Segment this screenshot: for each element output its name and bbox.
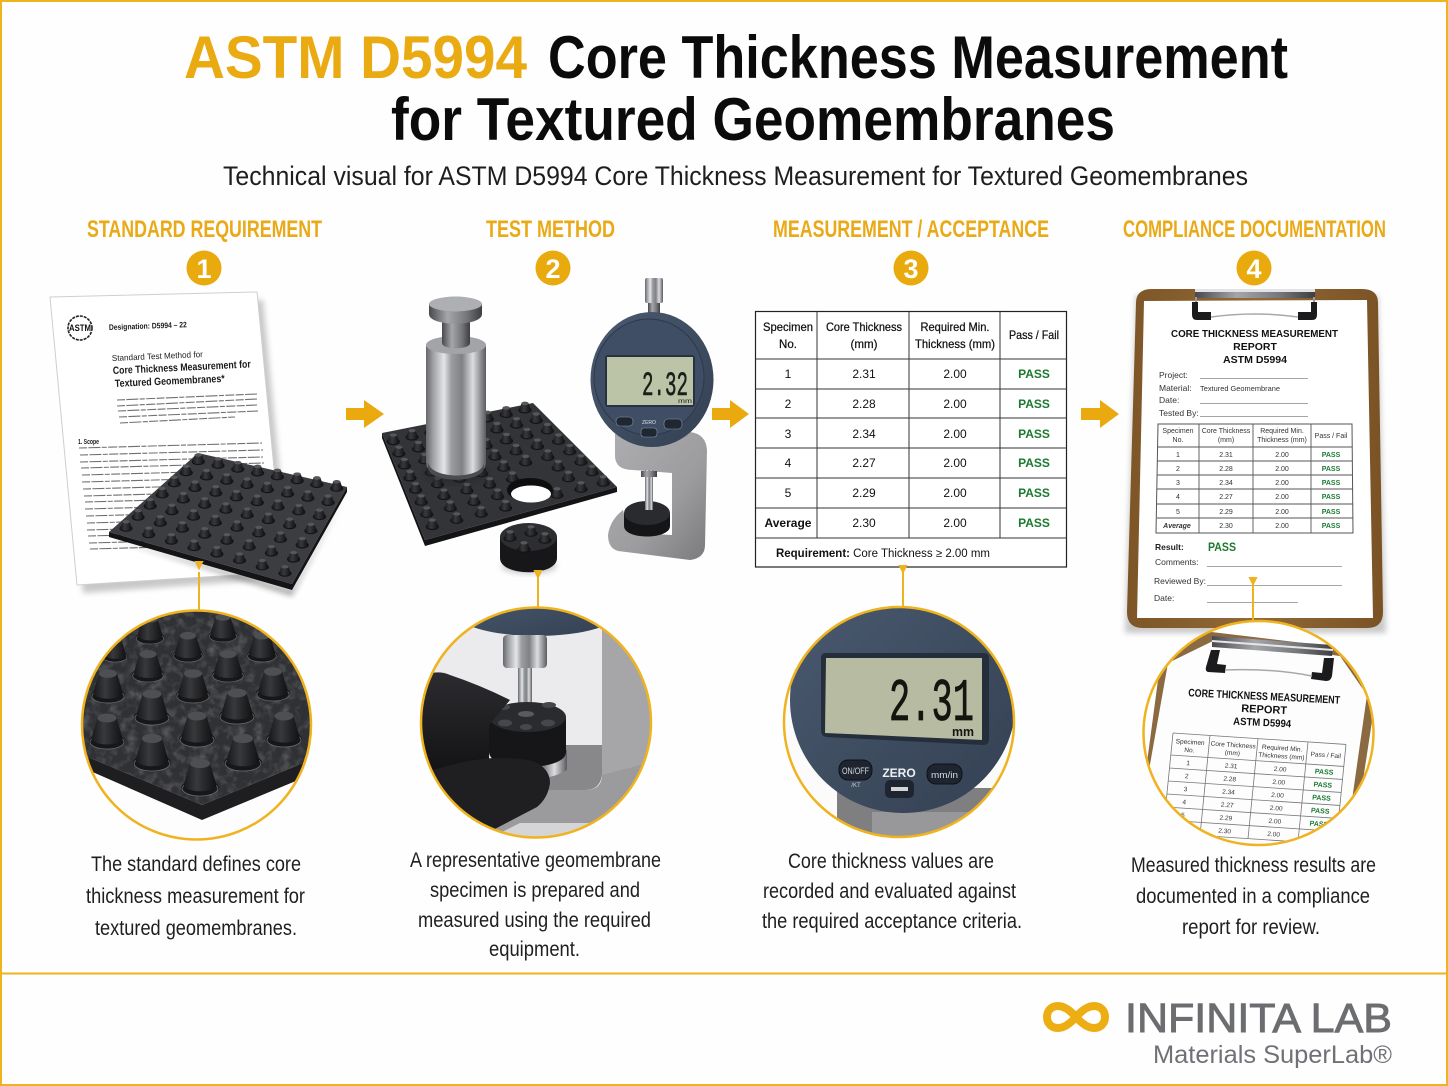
report table in detail: 5 bbox=[1181, 812, 1185, 819]
table rows: 2.34 bbox=[852, 427, 876, 441]
report table cells: 2 bbox=[1176, 466, 1180, 473]
table rows bbox=[765, 367, 967, 530]
table rows: 2.27 bbox=[852, 456, 876, 470]
report title: CORE THICKNESS MEASUREMENT bbox=[1171, 328, 1339, 340]
table rows: Average bbox=[765, 516, 812, 530]
caption 4 bbox=[1131, 854, 1376, 939]
step number badges bbox=[186, 250, 1272, 286]
textured geomembrane sample bbox=[109, 453, 347, 590]
table grid bbox=[755, 311, 1067, 538]
paper heading text: Designation: D5994 – 22 bbox=[109, 320, 187, 332]
report table in detail: 2.00 bbox=[1268, 818, 1282, 826]
report table in detail: PASS bbox=[1314, 769, 1334, 777]
ASTM logo on paper bbox=[68, 316, 92, 340]
report table pass column: PASS bbox=[1322, 494, 1341, 501]
report table cells: 2.34 bbox=[1219, 480, 1233, 487]
caption 1: textured geomembranes. bbox=[95, 917, 297, 940]
pass column: PASS bbox=[1018, 427, 1050, 441]
report table pass column: PASS bbox=[1322, 466, 1341, 473]
caption 2: specimen is prepared and bbox=[430, 879, 640, 902]
table rows: 2.28 bbox=[852, 397, 876, 411]
paper heading text: Standard Test Method for bbox=[112, 349, 203, 363]
report table cells: 2.00 bbox=[1275, 466, 1289, 473]
connector 2 bbox=[535, 571, 541, 607]
caption 4: documented in a compliance bbox=[1136, 885, 1370, 908]
table header: Required Min. bbox=[920, 320, 990, 334]
report table in detail: 2 bbox=[1185, 773, 1189, 780]
panel: standard document and geomembrane sample bbox=[50, 292, 347, 596]
caption 3: Core thickness values are bbox=[788, 850, 994, 873]
report table in detail: PASS bbox=[1311, 808, 1330, 816]
panel: test equipment bbox=[382, 278, 714, 574]
table rows: 2.00 bbox=[943, 427, 967, 441]
table header: Pass / Fail bbox=[1009, 328, 1059, 342]
panel: measurement table bbox=[755, 311, 1067, 567]
digital thickness gauge bbox=[590, 278, 714, 560]
report table cells: 2.29 bbox=[1219, 509, 1233, 516]
report table cells: 4 bbox=[1176, 494, 1180, 501]
report table pass column: PASS bbox=[1322, 480, 1341, 487]
report table in detail: 2.29 bbox=[1219, 815, 1233, 822]
report table in detail: Core Thickness bbox=[1210, 741, 1257, 751]
detail circle 4: report close-up bbox=[1144, 621, 1376, 850]
gauge spindle bbox=[645, 470, 653, 510]
report table in detail: 2.00 bbox=[1271, 792, 1284, 800]
ASTM logo on paper: ASTM bbox=[69, 323, 91, 334]
gauge buttons bbox=[616, 417, 682, 437]
arrow 3 bbox=[1081, 400, 1119, 428]
report table in detail: PASS bbox=[1309, 821, 1329, 829]
pass column: PASS bbox=[1018, 486, 1050, 500]
clipboard edges in detail bbox=[1148, 632, 1372, 796]
table header bbox=[763, 320, 1059, 351]
black glove bbox=[422, 672, 510, 770]
detail circle 3: gauge display: mm bbox=[952, 724, 974, 739]
pass column: PASS bbox=[1018, 397, 1050, 411]
report table in detail: 2.00 bbox=[1269, 805, 1283, 813]
gauge frame behind display bbox=[837, 788, 992, 832]
report table cells: 2.30 bbox=[1219, 523, 1233, 530]
logo: Infinita Lab bbox=[1047, 995, 1393, 1069]
table header: (mm) bbox=[850, 337, 878, 351]
report title in detail bbox=[1188, 687, 1341, 730]
report title: ASTM D5994 bbox=[1223, 354, 1287, 366]
report title bbox=[1171, 328, 1339, 366]
arrow 2 bbox=[712, 400, 749, 428]
report table in detail: 2.34 bbox=[1222, 789, 1235, 796]
report result: Comments: bbox=[1155, 557, 1198, 567]
report table cells: 2.00 bbox=[1275, 523, 1289, 530]
specimen in detail bbox=[489, 717, 566, 767]
gauge C-frame bbox=[608, 432, 707, 560]
table header: Thickness (mm) bbox=[915, 337, 995, 351]
LCD screen bbox=[825, 658, 982, 740]
table rows: 4 bbox=[785, 456, 792, 470]
measured specimen in gauge bbox=[624, 513, 670, 536]
report table cells: 1 bbox=[1176, 452, 1180, 459]
report table in detail: Thickness (mm) bbox=[1258, 752, 1305, 762]
report fields: Date: bbox=[1159, 395, 1179, 405]
report table in detail: Required Min. bbox=[1262, 744, 1303, 754]
section headings: MEASUREMENT / ACCEPTANCE bbox=[773, 216, 1049, 243]
table rows: 2.00 bbox=[943, 516, 967, 530]
report table in detail: 4 bbox=[1182, 799, 1187, 806]
caption 2: measured using the required bbox=[418, 909, 651, 932]
display buttons bbox=[839, 760, 962, 798]
caption 3: recorded and evaluated against bbox=[763, 880, 1016, 903]
table rows: 5 bbox=[785, 486, 792, 500]
report table cells: Average bbox=[1162, 523, 1191, 530]
title: ASTM D5994 bbox=[184, 24, 528, 91]
caption 3 bbox=[762, 850, 1022, 933]
report table bbox=[1156, 424, 1353, 533]
caption 1: thickness measurement for bbox=[86, 885, 305, 908]
report table cells: Core Thickness bbox=[1202, 428, 1251, 435]
report result: Result: bbox=[1155, 542, 1184, 552]
pass column: PASS bbox=[1018, 367, 1050, 381]
report table in detail: No. bbox=[1184, 747, 1195, 755]
sample shadow bbox=[109, 492, 347, 596]
report table cells: 2.31 bbox=[1219, 452, 1233, 459]
report table cells: 2.00 bbox=[1275, 452, 1289, 459]
wordmark: INFINITA LAB bbox=[1125, 995, 1392, 1041]
report table in detail: 3 bbox=[1183, 786, 1188, 793]
caption 4: Measured thickness results are bbox=[1131, 854, 1376, 877]
report table cells: No. bbox=[1173, 437, 1183, 444]
small circular specimen bbox=[500, 523, 557, 574]
report table in detail: 2.00 bbox=[1273, 766, 1287, 774]
report table cells: 2.27 bbox=[1219, 494, 1233, 501]
punched geomembrane sheet bbox=[382, 402, 617, 546]
report table pass column: PASS bbox=[1322, 452, 1341, 459]
report table cells: 3 bbox=[1176, 480, 1180, 487]
section headings: STANDARD REQUIREMENT bbox=[87, 216, 322, 243]
caption 1 bbox=[86, 853, 305, 940]
detail circle 2: gloved hand placing specimen bbox=[420, 606, 652, 839]
report result bbox=[1154, 540, 1342, 603]
report title in detail: ASTM D5994 bbox=[1233, 716, 1292, 730]
connector 4 bbox=[1250, 578, 1256, 621]
report result: PASS bbox=[1208, 540, 1236, 554]
gauge display bbox=[605, 355, 695, 407]
report fields: Textured Geomembrane bbox=[1200, 384, 1280, 393]
report fields bbox=[1159, 370, 1280, 418]
section headings: TEST METHOD bbox=[486, 216, 615, 243]
report paper bbox=[1137, 300, 1373, 618]
pass column: PASS bbox=[1018, 456, 1050, 470]
footer divider bbox=[0, 972, 1448, 974]
caption 1: The standard defines core bbox=[91, 853, 301, 876]
report title: REPORT bbox=[1233, 341, 1277, 353]
display buttons: ON/OFF bbox=[842, 766, 869, 777]
report table cells bbox=[1162, 428, 1348, 530]
gauge plunger bbox=[648, 302, 660, 316]
table rows: 2.30 bbox=[852, 516, 876, 530]
detail circle 3: gauge display bbox=[782, 606, 1016, 838]
digital thickness gauge: 2.32 bbox=[642, 368, 688, 406]
paper body text lines bbox=[79, 394, 272, 549]
arrow 1 bbox=[346, 400, 384, 428]
report table in detail bbox=[1163, 733, 1346, 844]
LCD reading: 2.31 bbox=[889, 671, 974, 739]
report table in detail: 2.28 bbox=[1223, 776, 1237, 783]
report fields: Material: bbox=[1159, 383, 1192, 393]
connector 1 bbox=[196, 562, 202, 611]
display buttons: ZERO bbox=[882, 766, 916, 780]
report fields: Tested By: bbox=[1159, 408, 1199, 418]
report table in detail: (mm) bbox=[1224, 750, 1240, 758]
report table cells: 2.00 bbox=[1275, 494, 1289, 501]
table rows: 1 bbox=[785, 367, 792, 381]
step number badges: 2 bbox=[545, 254, 561, 284]
table rows: 2.00 bbox=[943, 456, 967, 470]
paper heading text: Textured Geomembranes* bbox=[115, 373, 226, 390]
paper heading text: 1. Scope bbox=[78, 439, 99, 446]
report table in detail: 2.27 bbox=[1220, 802, 1234, 809]
table rows: 3 bbox=[785, 427, 792, 441]
report table in detail: PASS bbox=[1313, 782, 1333, 790]
table header: No. bbox=[779, 337, 797, 351]
report table cells: 2.28 bbox=[1219, 466, 1233, 473]
paper heading text: Core Thickness Measurement for bbox=[113, 359, 251, 377]
panel: compliance report on clipboard bbox=[1125, 289, 1386, 633]
report table cells: Pass / Fail bbox=[1315, 433, 1348, 440]
cut-off press cylinder bbox=[426, 296, 486, 482]
report table in detail: Specimen bbox=[1175, 738, 1205, 747]
detail circle 1: textured surface bbox=[80, 609, 312, 841]
step number badges: 4 bbox=[1246, 254, 1262, 284]
report table in detail: 2.00 bbox=[1272, 779, 1286, 787]
report result: Reviewed By: bbox=[1154, 576, 1206, 586]
gauge frame in detail bbox=[602, 630, 650, 775]
report table in detail: 2.00 bbox=[1267, 831, 1281, 839]
section headings bbox=[87, 216, 1386, 243]
title: for Textured Geomembranes bbox=[391, 86, 1115, 153]
dial face bbox=[790, 608, 1013, 813]
pass column bbox=[1018, 367, 1050, 530]
caption 2: equipment. bbox=[489, 938, 580, 961]
report table pass column: PASS bbox=[1322, 523, 1341, 530]
report table cells: Required Min. bbox=[1260, 428, 1304, 435]
report field lines bbox=[1200, 378, 1308, 416]
spindle in detail bbox=[503, 635, 547, 668]
icon: infinity mark bbox=[1047, 1006, 1105, 1028]
report table pass column: PASS bbox=[1322, 509, 1341, 516]
gauge dial bbox=[590, 312, 714, 447]
anvil in detail bbox=[546, 750, 567, 777]
table rows: 2 bbox=[785, 397, 792, 411]
table rows: 2.29 bbox=[852, 486, 876, 500]
title bbox=[184, 24, 1288, 153]
report table cells: Thickness (mm) bbox=[1257, 437, 1307, 444]
table rows: 2.00 bbox=[943, 367, 967, 381]
report table cells: (mm) bbox=[1218, 437, 1234, 444]
table header: Core Thickness bbox=[826, 320, 902, 334]
connector 3 bbox=[900, 566, 906, 607]
title: Core Thickness Measurement bbox=[548, 24, 1288, 91]
table rows: 2.00 bbox=[943, 397, 967, 411]
subtitle: Technical visual for ASTM D5994 Core Thickness Measurement for Textured Geomembranes bbox=[223, 161, 1248, 191]
report table cells: 2.00 bbox=[1275, 509, 1289, 516]
report table pass column bbox=[1322, 452, 1341, 530]
gauge head in detail bbox=[474, 608, 599, 636]
caption 3: the required acceptance criteria. bbox=[762, 910, 1022, 933]
report table cells: 5 bbox=[1176, 509, 1180, 516]
clip in detail bbox=[1206, 636, 1334, 681]
report table in detail: PASS bbox=[1312, 795, 1331, 803]
report table cells: Specimen bbox=[1162, 428, 1194, 435]
report table cells: 2.00 bbox=[1275, 480, 1289, 487]
clipboard board bbox=[1127, 289, 1383, 628]
standard paper sheet bbox=[50, 292, 284, 585]
caption 2: A representative geomembrane bbox=[410, 849, 661, 872]
report title in detail: CORE THICKNESS MEASUREMENT bbox=[1188, 687, 1341, 707]
report title in detail: REPORT bbox=[1241, 703, 1288, 717]
report fields: Project: bbox=[1159, 370, 1188, 380]
digital thickness gauge: ZERO bbox=[642, 420, 656, 426]
caption 2 bbox=[410, 849, 661, 961]
clipboard clip bbox=[1192, 289, 1317, 320]
paper heading text bbox=[78, 320, 251, 446]
pass column: PASS bbox=[1018, 516, 1050, 530]
report result: Date: bbox=[1154, 593, 1174, 603]
caption 4: report for review. bbox=[1182, 916, 1320, 939]
report table in detail: 1 bbox=[1186, 760, 1191, 767]
display bezel bbox=[821, 653, 989, 745]
step number badges: 3 bbox=[903, 254, 919, 284]
report table in detail: 2.30 bbox=[1218, 828, 1232, 835]
table rows: 2.00 bbox=[943, 486, 967, 500]
report paper in detail bbox=[1149, 640, 1367, 850]
display buttons: /KT bbox=[851, 783, 861, 789]
display buttons: mm/in bbox=[931, 770, 958, 781]
table rows: 2.31 bbox=[852, 367, 876, 381]
table header: Specimen bbox=[763, 320, 813, 334]
report table in detail: Pass / Fail bbox=[1310, 751, 1342, 760]
step number badges: 1 bbox=[196, 254, 212, 284]
tagline: Materials SuperLab® bbox=[1153, 1041, 1393, 1069]
requirement note: Requirement: Core Thickness ≥ 2.00 mm bbox=[776, 548, 990, 560]
digital thickness gauge: mm bbox=[678, 399, 692, 405]
report table in detail: 2.31 bbox=[1224, 763, 1238, 770]
